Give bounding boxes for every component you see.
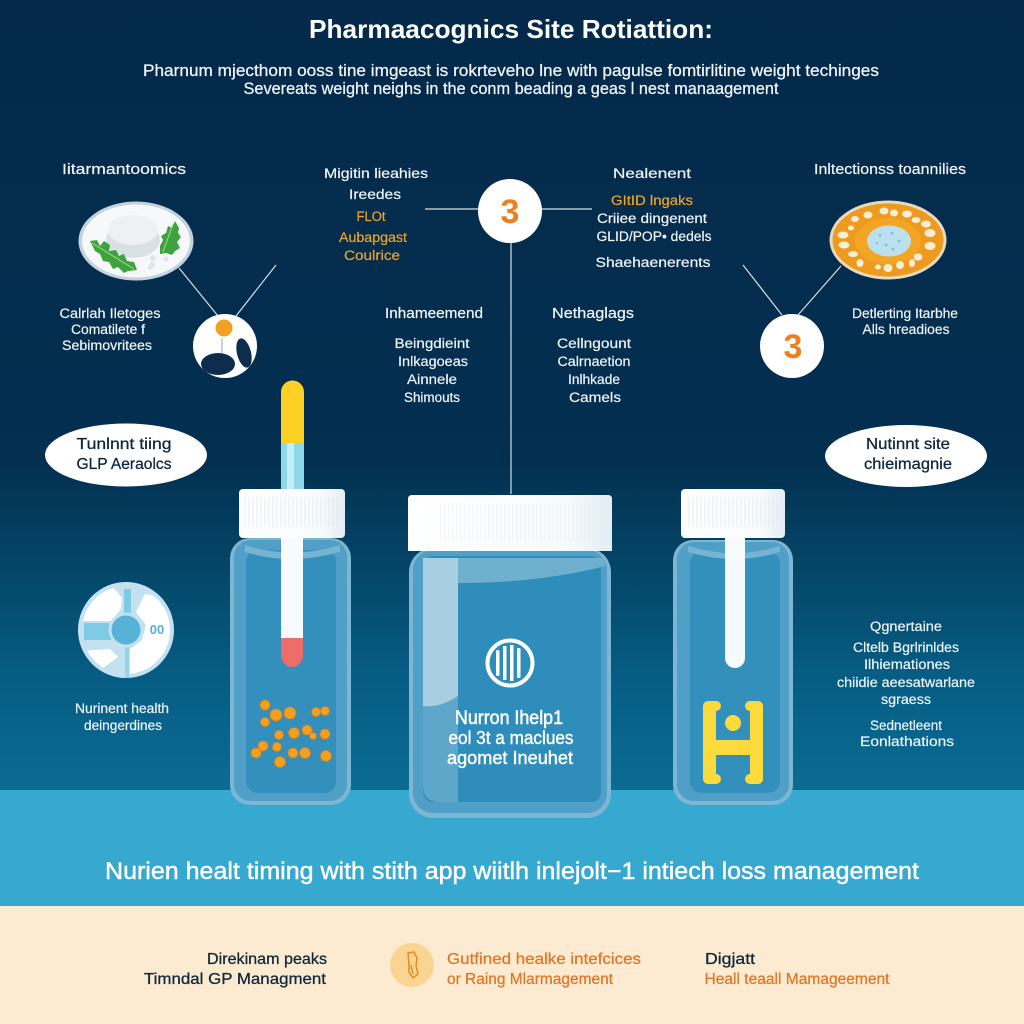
panel: mid-right list: Camels [569,390,621,405]
footer: right text: Digjatt [705,951,756,968]
icon: striped circle [488,640,532,686]
text block: right list: Qgnertaine [870,619,942,634]
stem [725,538,745,668]
subtitle: Pharnum mjecthom ooss tine imgeast is rokrteveho lne with pagulse fomtirlitine weight techinges [143,61,879,80]
panel: center-left list: FLOt [356,209,386,224]
panel: center-right list: Shaehaenerents [596,255,711,270]
footer: left text: Timndal GP Managment [144,971,327,988]
icon: left disc [78,582,180,680]
text block: left disc: Nurinent health [75,701,169,716]
panel: mid-right list: Inlhkade [568,372,620,387]
cap [408,495,612,551]
text block: right list: Eonlathations [860,734,954,749]
panel: mid-left list: Shimouts [404,390,460,405]
callout: right oval [825,425,987,487]
panel: center-right list [596,165,712,270]
text block: Alls hreadioes [862,322,950,337]
icon: plate with herbs [78,202,194,280]
panel: mid-left list: Beingdieint [394,336,470,351]
panel: center-left list: Aubapgast [339,230,407,245]
panel: center-left list [324,165,428,263]
panel: mid-left list: Inhameemend [385,305,483,322]
text block: Calrlah Iletoges [60,306,161,321]
heading: Inltectionss toannilies [814,161,966,178]
panel: center-left list: Migitin lieahies [324,165,428,181]
text block: Detlerting Itarbhe [852,306,958,321]
panel: center-left list: Ireedes [349,187,401,202]
text block: Comatilete f [71,322,145,337]
footer: center text [447,951,641,988]
panel: mid-left list [385,305,483,405]
title: Pharmaacognics Site Rotiattion: [309,14,713,44]
panel: left top [60,161,276,378]
background [0,0,1024,792]
icon: center number circle [478,179,542,243]
footer: right text: Heall teaall Mamageement [704,971,890,988]
text block: left disc: deingerdines [84,718,162,733]
callout: right oval: Nutinnt site [866,436,950,453]
text block: right list: Sednetleent [870,718,942,733]
icon: white circle with injection site [193,314,257,378]
icon: number circle: 3 [784,328,802,366]
panel: mid-right list: Calrnaetion [558,354,630,369]
cap [239,489,345,538]
heading: Iitarmantoomics [62,161,186,178]
callout: left oval [45,424,207,486]
callout: right oval: chieimagnie [864,456,952,473]
subtitle: Severeats weight neighs in the conm beading a geas l nest manaagement [244,79,779,98]
text block: right list: Cltelb Bgrlrinldes [853,640,959,655]
icon: left disc: 00 [150,622,164,637]
callout: left oval: GLP Aeraolcs [76,456,172,473]
panel: center-right list: GItID lngaks [611,193,693,208]
text block: right list: Ilhiemationes [864,657,950,672]
panel: center-right list: Criiee dingenent [597,211,707,226]
panel: mid-right list: Nethaglags [552,305,634,322]
cyan band [0,790,1024,907]
icon: center number circle: 3 [501,193,519,231]
vial body [230,538,351,805]
icon: yellow H symbol [703,701,763,784]
panel: center-right list: GLID/POP• dedels [596,229,712,244]
footer: right text [704,951,890,988]
connector lines [179,265,276,316]
footer: center text: Gutfined healke intefcices [447,951,641,968]
subtitle [143,61,879,98]
dropper stem [281,538,303,667]
left vial [230,380,351,805]
footer: left text [144,951,327,988]
jar label text: eol 3t a maclues [448,728,574,748]
text block [852,306,958,337]
panel: mid-right list: Cellngount [557,336,631,351]
jar body [409,548,611,818]
panel: center-right list: Nealenent [613,165,691,181]
text block: Sebimovritees [62,338,152,353]
cap [681,489,785,538]
icon: footer orange circle [390,943,434,987]
band heading: Nurien healt timing with stith app wiitlh inlejolt−1 intiech loss management [105,858,919,885]
panel: center-left list: Coulrice [344,248,400,263]
text block: right list: chiidie aeesatwarlane [837,675,975,690]
panel: mid-left list: Inlkagoeas [398,354,468,369]
cream footer panel [0,906,1024,1024]
text block [60,306,161,353]
vial body [673,540,793,805]
jar label text [447,708,574,768]
jar highlight [423,558,605,802]
text block: left disc [75,701,169,733]
panel: mid-right list [552,305,634,405]
dropper top [281,380,304,489]
connector lines: center [425,209,592,494]
panel: mid-left list: Ainnele [407,372,457,387]
text block: right list: sgraess [881,692,931,707]
text block: right list [837,619,975,749]
jar label text: Nurron Ihelp1 [455,708,563,729]
callout: left oval: Tunlnnt tiing [76,436,172,453]
footer: center text: or Raing Mlarmagement [447,971,614,988]
footer: left text: Direkinam peaks [207,951,327,968]
center jar [408,495,612,818]
icon: number circle [760,314,824,378]
connector lines [743,265,841,315]
panel: right top [743,161,966,378]
right vial [673,489,793,805]
icon: orange petri disc [830,200,946,280]
orange particles [251,700,332,768]
jar label text: agomet Ineuhet [447,748,573,768]
